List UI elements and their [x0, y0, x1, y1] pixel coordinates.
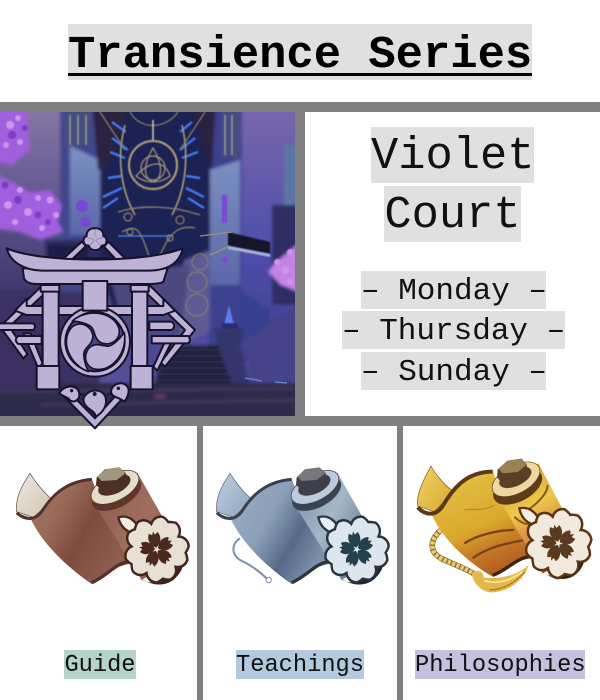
divider: panel frame vertical	[295, 112, 305, 416]
central door	[92, 100, 216, 330]
ground	[0, 383, 305, 433]
label: Philosophies: Philosophies	[415, 652, 586, 679]
title: Transience Series	[68, 29, 532, 81]
text: location name Court: Court	[384, 189, 521, 241]
text: location name Violet: Violet	[371, 130, 534, 182]
scroll paper flap	[216, 473, 251, 517]
scroll cord	[233, 538, 268, 580]
scroll sheet	[17, 478, 137, 584]
text: day Thursday: – Thursday –	[342, 314, 565, 349]
icon: teachings scroll	[216, 467, 390, 584]
text: day Sunday: – Sunday –	[361, 355, 547, 390]
icon: guide scroll	[16, 467, 190, 584]
left tower	[60, 100, 100, 292]
blue lamp	[222, 305, 238, 329]
text: day Monday: – Monday –	[361, 274, 547, 309]
scroll roll	[291, 473, 384, 580]
lower door ornament	[165, 250, 210, 345]
dark beam right	[228, 232, 270, 257]
label: Guide: Guide	[64, 652, 136, 679]
scroll paper flap	[16, 473, 51, 517]
stairs	[155, 345, 240, 383]
right tower	[208, 100, 242, 430]
divider: left material column	[197, 426, 203, 700]
glowing rays	[103, 122, 204, 236]
scroll tassel	[472, 565, 529, 592]
scroll sheet	[418, 471, 538, 577]
scroll roll	[91, 473, 184, 580]
scroll flower	[318, 517, 340, 533]
label: Teachings: Teachings	[236, 652, 364, 679]
scroll flower	[519, 508, 540, 524]
scroll sheet	[217, 478, 337, 584]
divider: right material column	[397, 426, 403, 700]
divider: panel frame bottom	[0, 416, 600, 426]
icon: philosophies scroll	[416, 458, 593, 592]
emblem tomoe ring	[58, 307, 131, 377]
emblem roof struts and flower	[62, 228, 127, 263]
emblem pillars	[37, 285, 153, 389]
emblem lower charm	[59, 383, 129, 428]
icon: domain emblem	[0, 227, 196, 430]
purple blossoms	[0, 100, 305, 295]
scene background	[0, 100, 305, 433]
divider: panel frame top	[0, 102, 600, 112]
scroll paper flap	[417, 466, 452, 512]
scroll braid	[432, 530, 476, 575]
scroll flower	[118, 517, 140, 533]
emblem torii beams	[7, 248, 183, 311]
scroll roll	[492, 463, 585, 573]
emblem side wings	[0, 285, 195, 371]
panel: location artwork	[0, 112, 295, 416]
gold ornament	[70, 112, 232, 316]
